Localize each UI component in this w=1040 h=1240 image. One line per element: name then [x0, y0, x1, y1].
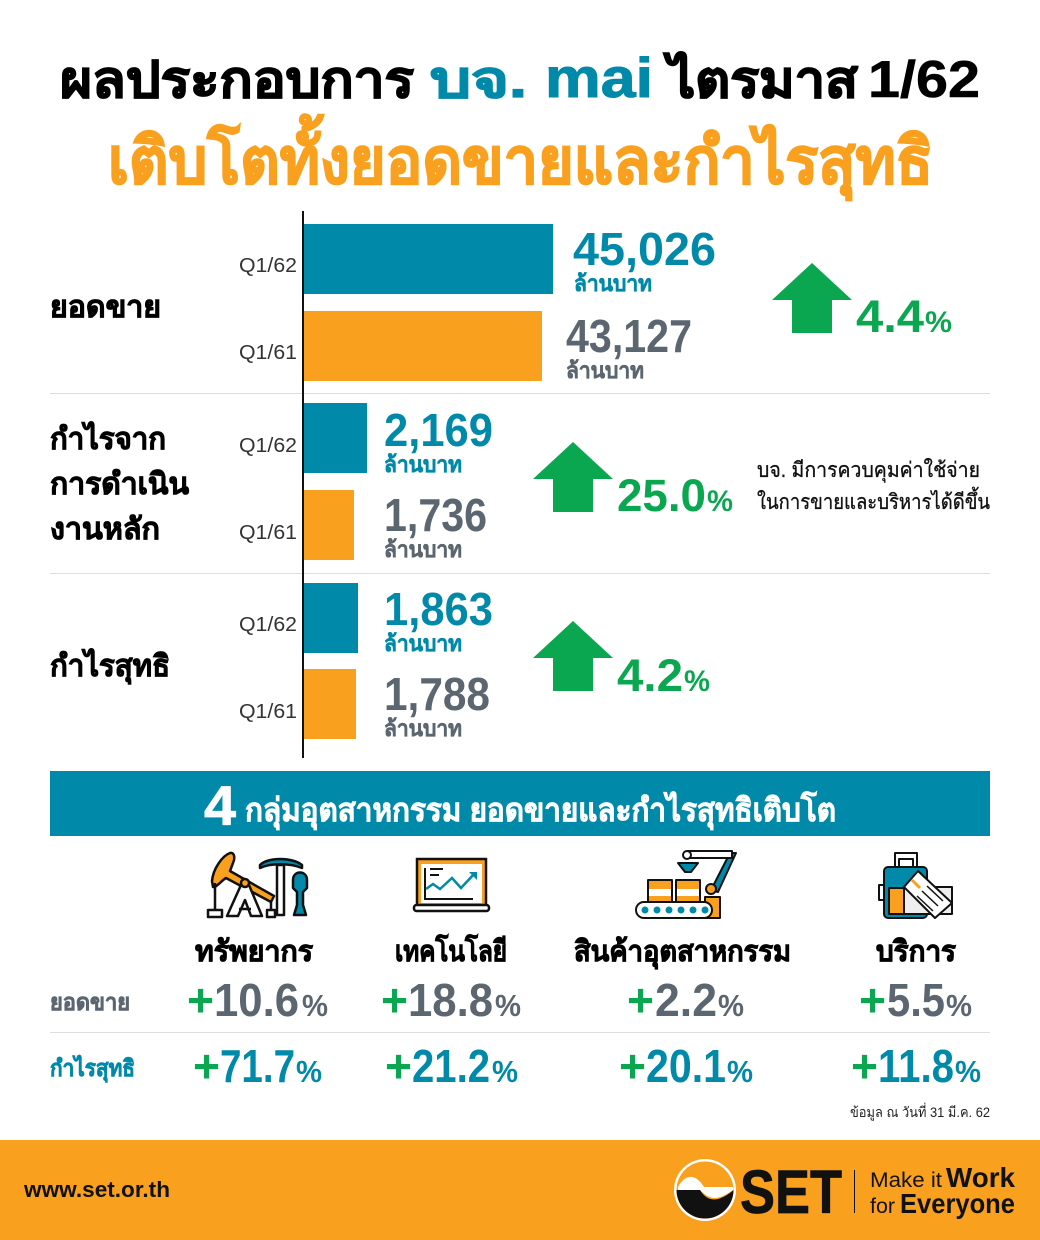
value: net profit Q1/62 [384, 583, 493, 656]
value: sales Q1/62: ล้านบาท [574, 271, 652, 296]
profit growth: technology: % [492, 1054, 518, 1089]
sales growth: industrial goods: % [718, 988, 744, 1023]
value: sales Q1/61 [566, 310, 692, 383]
percent: sales growth [856, 291, 952, 342]
title [60, 46, 980, 109]
bar chart: sales [239, 224, 553, 381]
icon: luggage and ticket [879, 853, 952, 918]
profit growth: technology: 21.2 [412, 1040, 490, 1092]
value: sales Q1/61: ล้านบาท [566, 358, 644, 383]
row label: sales: ยอดขาย [50, 989, 130, 1015]
heading: sales: ยอดขาย [50, 291, 161, 324]
bar chart: sales: Q1/62 [239, 255, 297, 277]
sales growth: industrial goods: 2.2 [655, 974, 717, 1026]
value: net profit Q1/61 [384, 668, 490, 741]
slogan: Everyone [900, 1188, 1015, 1219]
title: ไตรมาส [663, 51, 859, 108]
percent: net profit growth: 4.2 [617, 650, 683, 701]
percent: net profit growth [617, 650, 710, 701]
profit growth: technology: + [385, 1040, 412, 1092]
slogan: for [870, 1195, 895, 1218]
sales growth: services [859, 974, 972, 1026]
arrow: sales up [772, 263, 852, 333]
title: บจ. [430, 52, 527, 108]
heading: operating profit [50, 421, 189, 546]
percent: operating profit growth: 25.0 [617, 470, 706, 521]
banner: 4 industries: 4 [204, 774, 236, 837]
heading: operating profit: กำไรจาก [50, 421, 166, 456]
profit growth: services [851, 1040, 981, 1092]
percent: operating profit growth: % [707, 485, 733, 518]
panel: operating profit [50, 403, 990, 562]
profit growth: resources: + [193, 1040, 220, 1092]
bar chart: operating profit: Q1/62 [239, 435, 297, 457]
profit growth: industrial goods: 20.1 [646, 1040, 726, 1092]
slogan [870, 1162, 1015, 1219]
sales growth: technology: % [495, 988, 521, 1023]
slogan: Make it [870, 1169, 942, 1192]
value: net profit Q1/62: ล้านบาท [384, 631, 462, 656]
row label: net profit: กำไรสุทธิ [50, 1054, 135, 1083]
profit growth: resources: 71.7 [220, 1040, 295, 1092]
sales growth: services: % [946, 988, 972, 1023]
profit growth: industrial goods: % [727, 1054, 753, 1089]
note: cost control: บจ. มีการควบคุมค่าใช้จ่าย [757, 458, 980, 483]
subtitle: เติบโตทั้งยอดขายและกำไรสุทธิ [108, 114, 933, 201]
industry name: industrial goods: สินค้าอุตสาหกรรม [574, 936, 791, 969]
percent: sales growth: % [925, 306, 952, 339]
bar chart: operating profit: Q1/61 [239, 522, 297, 544]
sales growth: resources: 10.6 [214, 974, 299, 1026]
SET logo: SET [740, 1158, 842, 1226]
banner: 4 industries [50, 771, 990, 837]
profit growth: services: + [851, 1040, 878, 1092]
percent: net profit growth: % [684, 665, 710, 698]
arrow: operating profit up [533, 442, 613, 512]
sales growth: technology [381, 974, 521, 1026]
sales growth: technology: + [381, 974, 408, 1026]
value: sales Q1/61: 43,127 [566, 310, 692, 362]
heading: net profit: กำไรสุทธิ [50, 648, 170, 685]
value: net profit Q1/61: ล้านบาท [384, 716, 462, 741]
profit growth: industrial goods [619, 1040, 753, 1092]
slogan: Work [946, 1162, 1015, 1193]
value: net profit Q1/62: 1,863 [384, 583, 493, 635]
profit growth: services: % [955, 1054, 981, 1089]
industry name: services: บริการ [876, 936, 956, 968]
panel: sales [50, 223, 952, 383]
data date note: ข้อมูล ณ วันที่ 31 มี.ค. 62 [850, 1103, 990, 1121]
bar chart: net profit: Q1/61 [239, 701, 297, 723]
icon: factory conveyor [636, 851, 736, 918]
value: operating profit Q1/61: 1,736 [384, 489, 487, 541]
value: operating profit Q1/62: ล้านบาท [384, 452, 462, 477]
profit growth: industrial goods: + [619, 1040, 646, 1092]
title: ผลประกอบการ [60, 52, 414, 108]
value: operating profit Q1/61: ล้านบาท [384, 537, 462, 562]
value: sales Q1/62: 45,026 [573, 223, 716, 275]
sales growth: technology: 18.8 [408, 974, 493, 1026]
sales growth: resources [187, 974, 328, 1026]
heading: operating profit: การดำเนิน [50, 468, 189, 501]
sales growth: services: + [859, 974, 886, 1026]
bar chart: net profit: Q1/62 [239, 614, 297, 636]
note: cost control [757, 458, 990, 514]
footer [0, 1140, 1040, 1240]
sales growth: industrial goods [627, 974, 744, 1026]
sales growth: services: 5.5 [887, 974, 945, 1026]
icon: laptop chart [414, 859, 489, 911]
value: net profit Q1/61: 1,788 [384, 668, 490, 720]
industry name: technology: เทคโนโลยี [395, 933, 507, 968]
icon: oil pump and tools [208, 853, 307, 917]
sales growth: resources: + [187, 974, 214, 1026]
panel: net profit [50, 583, 710, 741]
value: operating profit Q1/62: 2,169 [384, 404, 493, 456]
SET logo [674, 1158, 842, 1226]
note: cost control: ในการขายและบริหารได้ดีขึ้น [757, 487, 990, 514]
industry name: resources: ทรัพยากร [195, 936, 313, 968]
title: 1/62 [868, 51, 980, 109]
title: mai [545, 46, 653, 109]
heading: operating profit: งานหลัก [50, 513, 160, 546]
banner: 4 industries: กลุ่มอุตสาหกรรม ยอดขายและกำไรสุทธิเติบโต [245, 791, 836, 831]
percent: sales growth: 4.4 [856, 291, 924, 342]
bar chart: net profit [239, 583, 358, 739]
website: www.set.or.th [23, 1177, 170, 1202]
bar chart: sales: Q1/61 [239, 342, 297, 364]
value: operating profit Q1/61 [384, 489, 487, 562]
bar chart: operating profit [239, 403, 367, 560]
profit growth: services: 11.8 [878, 1040, 954, 1092]
sales growth: resources: % [302, 988, 328, 1023]
profit growth: resources: % [296, 1054, 322, 1089]
arrow: net profit up [533, 621, 613, 691]
profit growth: technology [385, 1040, 518, 1092]
profit growth: resources [193, 1040, 322, 1092]
value: operating profit Q1/62 [384, 404, 493, 477]
sales growth: industrial goods: + [627, 974, 654, 1026]
